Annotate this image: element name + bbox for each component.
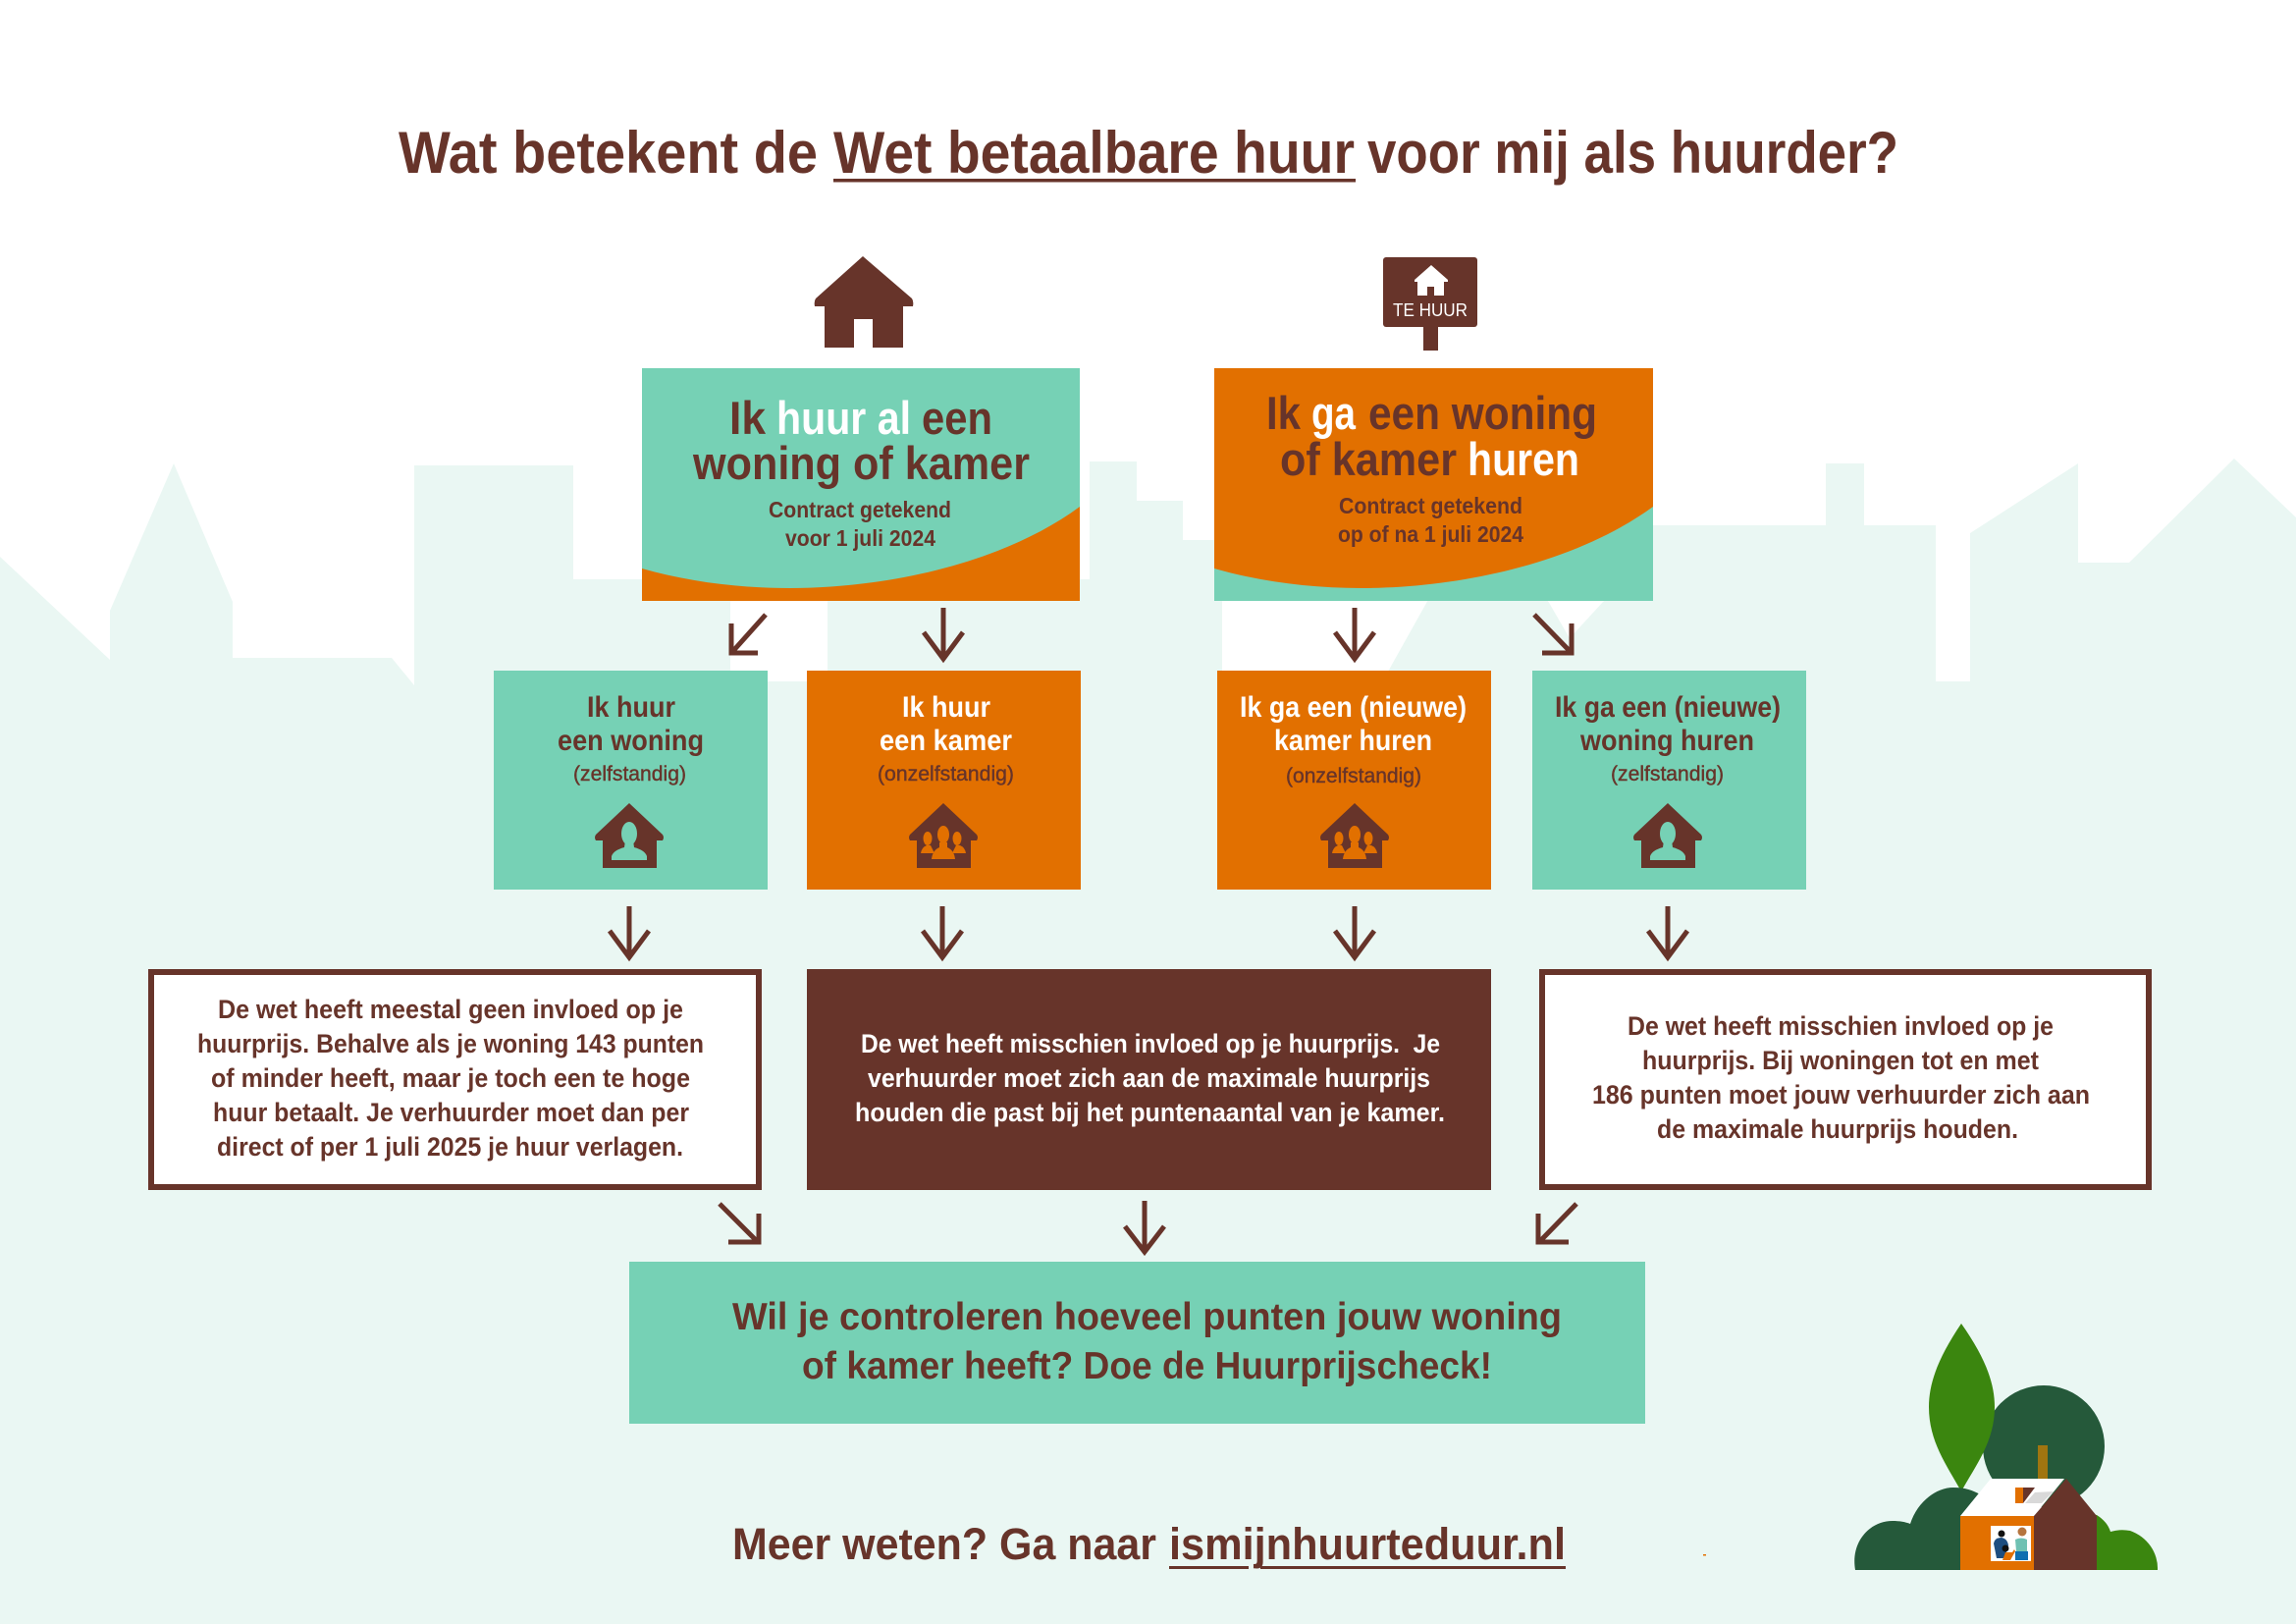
panel: ik ga huren: ga <box>1311 387 1357 439</box>
panel: ik huur al: Contract getekend <box>769 497 951 522</box>
panel: ik huur al: woning of kamer <box>692 437 1030 489</box>
footer link: Meer weten? Ga naar <box>732 1519 1156 1569</box>
panel: ik huur een kamer: Ik huur <box>902 691 990 724</box>
panel: ik huur een kamer: een kamer <box>880 725 1012 757</box>
arrow: down left <box>731 615 766 653</box>
panel: nieuwe woning huren: (zelfstandig) <box>1611 763 1724 785</box>
title <box>399 120 1898 186</box>
arrow: down right <box>1534 615 1572 653</box>
panel: woning huurders uitleg: of minder heeft, maar je toch een te hoge <box>211 1063 690 1093</box>
title: Wet betaalbare huur <box>833 120 1355 186</box>
panel: ik huur een kamer: (onzelfstandig) <box>878 763 1014 785</box>
panel: ik huur een woning: Ik huur <box>587 691 675 724</box>
panel: nieuwe woning uitleg: de maximale huurprijs houden. <box>1657 1114 2018 1144</box>
panel: kamer uitleg <box>807 969 1491 1190</box>
panel: huurprijscheck: of kamer heeft? Doe de Huurprijscheck! <box>802 1345 1492 1387</box>
panel: ik huur een kamer <box>807 671 1081 890</box>
panel: ik ga huren: huren <box>1468 433 1579 485</box>
panel: ik ga huren: een woning <box>1368 387 1597 439</box>
icon: house with group <box>909 803 978 868</box>
icon: house with group <box>1320 803 1389 868</box>
panel: woning huurders uitleg: direct of per 1 juli 2025 je huur verlagen. <box>217 1132 683 1162</box>
arrow: down left <box>1538 1204 1576 1242</box>
arrow: down <box>1648 906 1687 957</box>
arrow: down <box>923 906 962 957</box>
panel: nieuwe woning uitleg: huurprijs. Bij woningen tot en met <box>1642 1046 2039 1075</box>
panel: kamer uitleg: verhuurder moet zich aan de maximale huurprijs <box>868 1063 1430 1093</box>
panel: ik huur een woning <box>494 671 768 890</box>
panel: woning huurders uitleg: De wet heeft meestal geen invloed op je <box>218 995 683 1024</box>
panel: ik huur al: huur al <box>776 392 911 444</box>
panel: huurprijscheck: Wil je controleren hoeveel punten jouw woning <box>732 1296 1562 1338</box>
panel: nieuwe kamer huren: kamer huren <box>1274 725 1432 757</box>
icon: te huur sign: TE HUUR <box>1393 300 1468 320</box>
arrow: down <box>610 906 649 957</box>
panel: ik huur al: Ik <box>729 392 767 444</box>
panel: kamer uitleg: houden die past bij het puntenaantal van je kamer. <box>855 1098 1445 1127</box>
icon: house with person <box>1633 803 1702 868</box>
title: voor mij als huurder? <box>1367 120 1898 186</box>
panel: ik ga huren: Ik <box>1266 387 1302 439</box>
panel: nieuwe woning uitleg <box>1542 972 2149 1187</box>
panel: huurprijscheck <box>629 1262 1645 1424</box>
panel: nieuwe woning huren: woning huren <box>1579 725 1754 757</box>
arrow: down <box>1335 906 1374 957</box>
panel: nieuwe woning huren <box>1532 671 1806 890</box>
panel: ik huur een woning: een woning <box>558 725 704 757</box>
panel: woning huurders uitleg: huurprijs. Behalve als je woning 143 punten <box>197 1029 704 1058</box>
panel: nieuwe woning uitleg: De wet heeft misschien invloed op je <box>1628 1011 2054 1041</box>
panel: ik ga huren <box>1214 368 1653 601</box>
panel: ik huur een woning: (zelfstandig) <box>573 763 686 785</box>
panel: nieuwe kamer huren: (onzelfstandig) <box>1286 765 1421 787</box>
footer link: ismijnhuurteduur.nl <box>1169 1519 1566 1569</box>
arrow: down <box>1335 608 1374 659</box>
panel: nieuwe woning huren: Ik ga een (nieuwe) <box>1555 691 1781 724</box>
panel: woning huurders uitleg <box>151 972 759 1187</box>
footer link <box>732 1519 1566 1569</box>
title: Wat betekent de <box>399 120 818 186</box>
panel: woning huurders uitleg: huur betaalt. Je verhuurder moet dan per <box>213 1098 689 1127</box>
panel: ik ga huren: Contract getekend <box>1339 493 1522 518</box>
panel: kamer uitleg: De wet heeft misschien invloed op je huurprijs. Je <box>861 1029 1440 1058</box>
panel: ik huur al <box>642 368 1080 601</box>
panel: ik ga huren: of kamer <box>1280 433 1457 485</box>
arrow: down <box>1125 1201 1164 1252</box>
panel: nieuwe woning uitleg: 186 punten moet jouw verhuurder zich aan <box>1592 1080 2090 1110</box>
panel: ik huur al: voor 1 juli 2024 <box>785 525 935 551</box>
panel: nieuwe kamer huren <box>1217 671 1491 890</box>
panel: nieuwe kamer huren: Ik ga een (nieuwe) <box>1240 691 1467 724</box>
arrow: down <box>924 608 963 659</box>
arrow: down right <box>720 1204 759 1242</box>
icon: house <box>815 256 913 348</box>
illustration: house with trees <box>1854 1324 2158 1570</box>
icon: te huur sign <box>1383 257 1477 351</box>
panel: ik huur al: een <box>922 392 992 444</box>
background skyline <box>0 459 2296 1624</box>
panel: ik ga huren: op of na 1 juli 2024 <box>1338 521 1523 547</box>
icon: house with person <box>595 803 664 868</box>
